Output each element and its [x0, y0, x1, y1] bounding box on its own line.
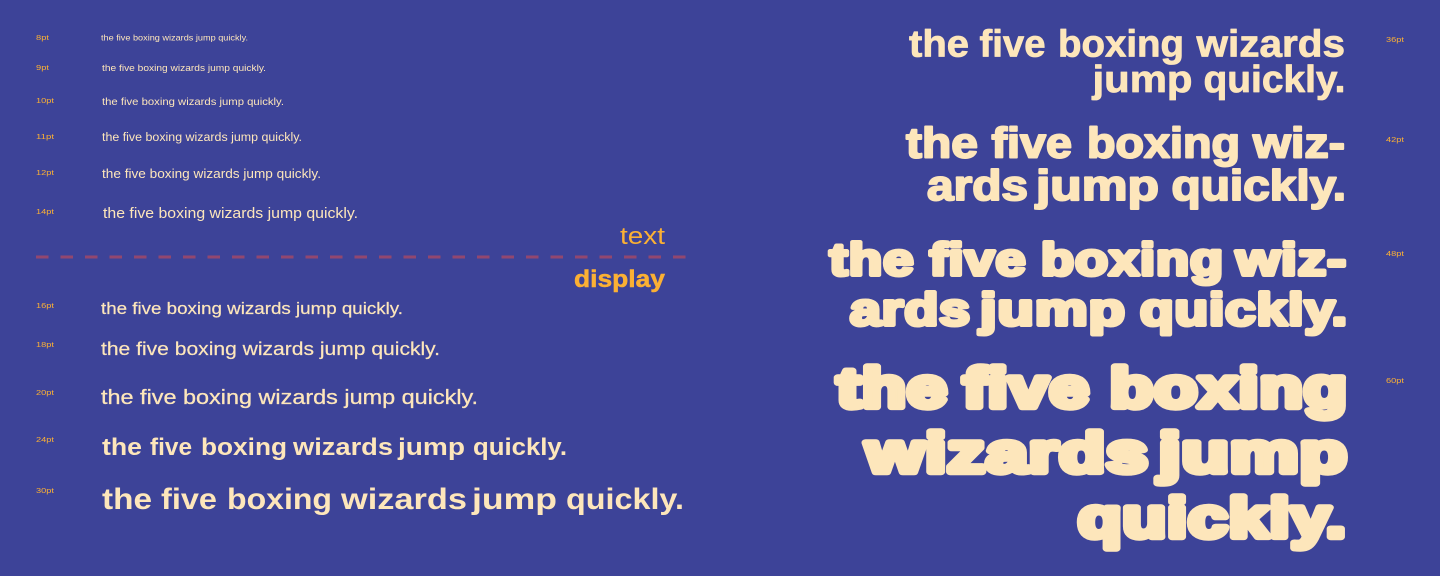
- size label: 12pt: 12pt: [36, 170, 54, 177]
- specimen line 2: jump: [1035, 162, 1159, 210]
- specimen: 20pt: the five boxing wizards jump quickly.: [101, 386, 478, 409]
- specimen line 1: wizards: [1195, 24, 1345, 66]
- specimen line 1: the: [909, 24, 969, 66]
- specimen line 2: [850, 284, 1348, 335]
- size label: 48pt: 48pt: [1386, 251, 1404, 258]
- size label: 11pt: 11pt: [36, 134, 54, 141]
- specimen line 2: jump: [979, 284, 1126, 335]
- specimen line 1: [830, 234, 1347, 285]
- specimen: 11pt: the five boxing wizards jump quickly.: [102, 132, 302, 144]
- specimen line 3: quickly.: [1078, 486, 1347, 549]
- specimen: 18pt: the five boxing wizards jump quickly.: [101, 338, 440, 359]
- specimen: 14pt: the five boxing wizards jump quickly.: [103, 206, 358, 222]
- size label: 9pt: 9pt: [36, 65, 49, 72]
- specimen line 2: quickly.: [1140, 284, 1348, 335]
- specimen line 1: [906, 120, 1345, 168]
- specimen: 9pt: the five boxing wizards jump quickly.: [102, 63, 266, 74]
- specimen line 1: wiz-: [1235, 234, 1347, 285]
- specimen line 2: wizards: [865, 421, 1149, 484]
- specimen: 30pt: five: [161, 483, 217, 516]
- specimen line 2: jump: [1091, 59, 1192, 101]
- specimen line 2: ards: [927, 162, 1028, 210]
- specimen line 2: ards: [850, 284, 971, 335]
- specimen: 24pt: [102, 434, 567, 461]
- size label: 10pt: 10pt: [36, 98, 54, 105]
- size label: 24pt: 24pt: [36, 437, 54, 444]
- specimen line 1: five: [963, 356, 1090, 419]
- size label: 36pt: 36pt: [1386, 37, 1404, 44]
- specimen: 16pt: the five boxing wizards jump quickly.: [101, 300, 403, 318]
- specimen line 1: boxing: [1110, 356, 1348, 419]
- specimen: 24pt: boxing: [201, 434, 287, 461]
- panel: 36pt specimen: [909, 24, 1404, 101]
- specimen: 24pt: jump: [397, 434, 465, 461]
- specimen: 30pt: wizards: [340, 483, 467, 516]
- panel: 42pt specimen: [906, 120, 1404, 210]
- specimen line 2: [927, 162, 1346, 210]
- specimen line 1: boxing: [1041, 234, 1224, 285]
- size label: 14pt: 14pt: [36, 209, 54, 216]
- size label: 16pt: 16pt: [36, 303, 54, 310]
- specimen line 2: [1091, 59, 1346, 101]
- specimen: 10pt: the five boxing wizards jump quickly.: [102, 96, 284, 108]
- specimen: 24pt: quickly.: [473, 434, 567, 461]
- specimen line 2: [865, 421, 1348, 484]
- specimen: 30pt: quickly.: [566, 483, 684, 516]
- specimen: 24pt: five: [150, 434, 192, 461]
- specimen line 1: five: [992, 120, 1072, 168]
- specimen line 1: [837, 356, 1348, 419]
- heading: text: text: [620, 223, 665, 250]
- specimen: 8pt: the five boxing wizards jump quickly.: [101, 32, 248, 42]
- specimen line 1: [909, 24, 1345, 66]
- specimen: 30pt: [102, 483, 684, 516]
- specimen line 1: wiz-: [1252, 120, 1345, 168]
- dashed divider: [36, 256, 686, 258]
- specimen line 1: boxing: [1058, 24, 1184, 66]
- specimen line 2: quickly.: [1204, 59, 1346, 101]
- panel: 60pt specimen: [837, 356, 1404, 549]
- specimen: 12pt: the five boxing wizards jump quickly.: [102, 167, 321, 181]
- specimen: 30pt: jump: [471, 483, 557, 516]
- panel: text size specimens: [36, 32, 358, 222]
- size label: 60pt: 60pt: [1386, 378, 1404, 385]
- specimen: 24pt: wizards: [292, 434, 393, 461]
- size label: 18pt: 18pt: [36, 342, 54, 349]
- size label: 20pt: 20pt: [36, 390, 54, 397]
- specimen line 1: the: [906, 120, 978, 168]
- specimen line 2: quickly.: [1172, 162, 1346, 210]
- size label: 30pt: 30pt: [36, 488, 54, 495]
- panel: 48pt specimen: [830, 234, 1404, 335]
- specimen: 30pt: the: [102, 483, 152, 516]
- heading: display: display: [574, 266, 666, 293]
- specimen: 24pt: the: [102, 434, 142, 461]
- specimen: 30pt: boxing: [227, 483, 332, 516]
- specimen line 1: the: [837, 356, 948, 419]
- specimen line 1: five: [980, 24, 1046, 66]
- panel: small display size specimens: [36, 300, 684, 516]
- specimen line 1: boxing: [1087, 120, 1240, 168]
- specimen line 2: jump: [1158, 421, 1348, 484]
- specimen line 1: five: [930, 234, 1026, 285]
- specimen line 1: the: [830, 234, 914, 285]
- size label: 8pt: 8pt: [36, 35, 49, 42]
- size label: 42pt: 42pt: [1386, 137, 1404, 144]
